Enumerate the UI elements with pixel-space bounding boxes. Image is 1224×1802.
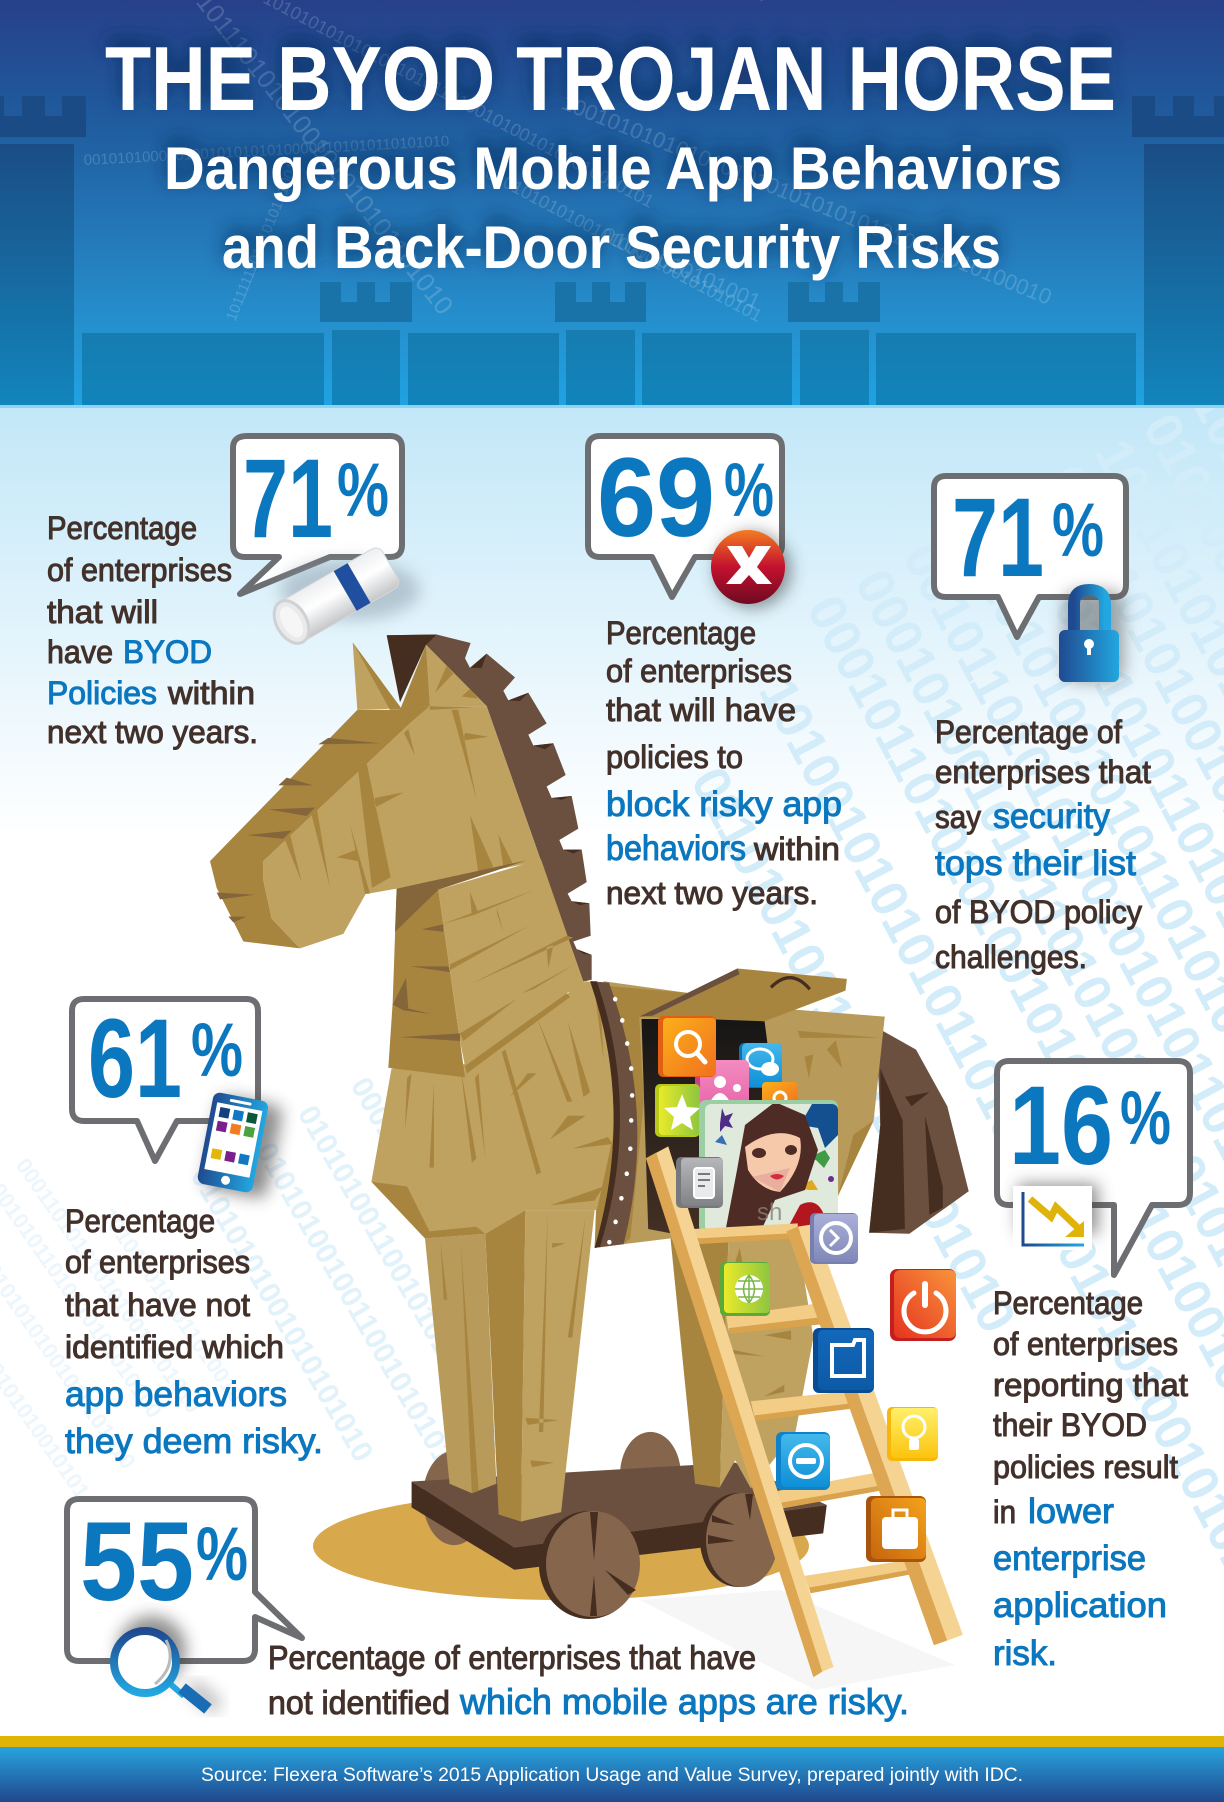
girl face <box>745 1133 801 1192</box>
app icon: search <box>658 1016 716 1077</box>
text: 71 percent description: Policies <box>47 675 157 711</box>
binary watermark, body: 01010101001010101010 <box>184 1162 379 1467</box>
text: 61 percent description: of enterprises <box>65 1244 250 1280</box>
app icon: minus <box>776 1432 830 1490</box>
icon: red x <box>711 530 791 608</box>
strap with rivets <box>590 981 637 1248</box>
binary watermark, body: 0110101001010101101010 <box>679 758 1027 1342</box>
text: 16 percent description: of enterprises <box>993 1326 1178 1362</box>
callout: 16 percent <box>997 1061 1190 1275</box>
binary watermark, header: 00101010001010010101010100000101010110101010 <box>83 133 450 169</box>
ladder <box>646 1146 963 1677</box>
icon: paper scroll <box>267 545 402 649</box>
text: 71 percent description: within <box>167 675 255 711</box>
percent sign: % <box>191 1008 243 1093</box>
stat: 16 <box>1009 1063 1113 1188</box>
head dark plane <box>210 706 430 948</box>
light blue body gradient <box>0 406 1224 836</box>
text: security description: security <box>993 797 1110 836</box>
text: security description: tops their list <box>935 844 1136 883</box>
neck and head <box>210 635 592 1077</box>
text: 16 percent description <box>993 1285 1188 1673</box>
face <box>263 706 541 948</box>
back wheels <box>423 1432 681 1545</box>
binary watermark, body: 01010100110010101010101010101 <box>291 1100 561 1534</box>
text: 61 percent description: they deem risky. <box>65 1422 323 1461</box>
percent sign: % <box>337 448 389 533</box>
text: 16 percent description: policies result <box>993 1449 1178 1485</box>
tail <box>869 1031 969 1234</box>
front leg <box>425 1210 595 1522</box>
binary watermark, body: 0101010010011001010101010 <box>249 1137 485 1513</box>
text: 69 percent description: that will have <box>606 692 796 728</box>
text: 16 percent description: their BYOD <box>993 1407 1147 1443</box>
text: 69 percent description: within <box>753 831 840 867</box>
subtitle line 1: Dangerous Mobile App Behaviors <box>164 135 1062 202</box>
text: 55 percent description <box>268 1639 909 1722</box>
app icon: globe <box>720 1262 770 1316</box>
mane <box>387 635 592 982</box>
text: 69 percent description: Percentage <box>606 615 756 651</box>
text: 16 percent description: application <box>993 1586 1167 1625</box>
stat: 71 <box>952 475 1044 600</box>
shadow under scroll <box>280 560 420 620</box>
text: security description: say <box>935 799 981 835</box>
icon: falling line chart <box>1013 1184 1098 1250</box>
app icon: briefcase <box>866 1496 926 1562</box>
header banner <box>0 0 1224 408</box>
lid <box>639 968 847 1021</box>
front wheels <box>539 1493 778 1619</box>
text: 71 percent description: BYOD <box>123 634 212 670</box>
binary watermark, header: 01001010101001 <box>598 222 765 314</box>
binary watermark, body: 1010100101011010010 <box>96 1204 249 1407</box>
source line: Source: Flexera Software’s 2015 Application Usage and Value Survey, prepared jointly with IDC. <box>201 1765 1023 1786</box>
binary watermark, header: 1001010101010101010101010101010101010100010 <box>558 89 1055 310</box>
text: 71 percent description: of enterprises <box>47 552 232 588</box>
under jaw shadow <box>395 860 527 932</box>
text: 69 percent description: block risky app <box>606 785 842 824</box>
stat: 69 <box>597 435 715 560</box>
stat: 61 <box>88 996 182 1121</box>
text: 61 percent description <box>65 1203 323 1461</box>
horse body <box>595 981 885 1248</box>
app icon: girl game: sh <box>757 1199 782 1226</box>
app icon: lock <box>762 1082 798 1106</box>
binary watermark, header: 10101010101001010010100101010101 <box>473 158 765 326</box>
text: 55 percent description: not identified <box>268 1684 450 1721</box>
app icon: power <box>890 1269 956 1341</box>
text: 71 percent description: Percentage <box>47 510 197 546</box>
callout: 71 percent BYOD policies <box>233 436 420 649</box>
callout: 69 percent <box>588 435 791 608</box>
trojan horse illustration <box>210 635 969 1690</box>
text: 69 percent description: behaviors <box>606 829 746 868</box>
text: 71 percent description: that will <box>47 594 158 630</box>
shoulder and chest <box>371 981 618 1238</box>
footer band <box>0 1736 1224 1802</box>
text: 55 percent description: Percentage of enterprises that have <box>268 1639 756 1676</box>
text: 61 percent description: identified which <box>65 1329 284 1365</box>
app icon: girl game <box>699 1100 838 1233</box>
ladder shadow <box>640 1590 955 1690</box>
app icon: folder <box>813 1328 874 1393</box>
door opening <box>641 1019 791 1238</box>
app icon: gear <box>810 1213 858 1264</box>
text: 61 percent description: Percentage <box>65 1203 215 1239</box>
app icon: chat <box>739 1043 782 1088</box>
text: 16 percent description: lower <box>1028 1492 1114 1531</box>
text: 16 percent description: risk. <box>993 1634 1057 1673</box>
text: 16 percent description: Percentage <box>993 1285 1143 1321</box>
neck front <box>438 859 587 1066</box>
binary watermark, header <box>83 0 1055 326</box>
icon: magnifying glass <box>114 1616 218 1709</box>
app icon: light bulb <box>887 1407 938 1461</box>
text: 69 percent description: next two years. <box>606 875 818 911</box>
text: 55 percent description: which mobile apps are risky. <box>459 1681 909 1722</box>
text: 61 percent description: that have not <box>65 1287 250 1323</box>
percent sign: % <box>724 448 774 533</box>
text: 16 percent description: reporting that <box>993 1367 1188 1403</box>
girl top <box>790 1202 824 1232</box>
text: 71 percent description <box>47 510 258 750</box>
cart platform <box>412 1463 827 1570</box>
neck side <box>388 889 465 1077</box>
icon: smartphone <box>196 1092 284 1199</box>
subtitle line 2: and Back-Door Security Risks <box>222 214 1001 281</box>
app icon: people <box>695 1060 749 1116</box>
text: security description: challenges. <box>935 939 1087 975</box>
stat: 55 <box>80 1499 194 1624</box>
face streaks <box>285 666 513 894</box>
percent sign: % <box>1052 488 1104 573</box>
stat: 71 <box>243 436 333 561</box>
binary watermark, body <box>0 352 1224 1627</box>
text: 61 percent description: app behaviors <box>65 1375 287 1414</box>
binary watermark, body: 00010101001011010101010 <box>344 1072 564 1419</box>
text: security description: Percentage of <box>935 714 1122 750</box>
app icon: star <box>655 1084 700 1137</box>
text: 16 percent description: enterprise <box>993 1539 1146 1578</box>
percent sign: % <box>1120 1076 1171 1161</box>
binary watermark, header: 101111110101010101001 <box>223 160 302 323</box>
text: 69 percent description: of enterprises <box>606 653 792 689</box>
girl hair <box>725 1102 818 1233</box>
ears <box>353 642 390 710</box>
app icon: document <box>676 1157 723 1208</box>
text: security description: enterprises that <box>935 754 1151 790</box>
castle: towers and wall <box>0 96 1224 405</box>
text: 69 percent description: policies to <box>606 739 743 775</box>
binary watermark, body: 0001101010101010010101010 <box>11 1154 206 1417</box>
text: security description: of BYOD policy <box>935 894 1142 930</box>
rear leg <box>671 1238 813 1489</box>
neck streaks <box>442 890 575 1073</box>
text: security description <box>935 714 1151 975</box>
ground shadow <box>313 1492 809 1600</box>
text: 71 percent description: have <box>47 634 113 670</box>
text: 69 percent description <box>606 615 842 911</box>
callout: 55 percent <box>67 1499 302 1709</box>
icon: padlock <box>1059 590 1124 682</box>
callout: 71 percent security <box>934 475 1126 682</box>
callout: 61 percent <box>72 996 284 1199</box>
percent sign: % <box>196 1512 248 1597</box>
text: 16 percent description: in <box>993 1494 1016 1530</box>
text: 71 percent description: next two years. <box>47 714 258 750</box>
